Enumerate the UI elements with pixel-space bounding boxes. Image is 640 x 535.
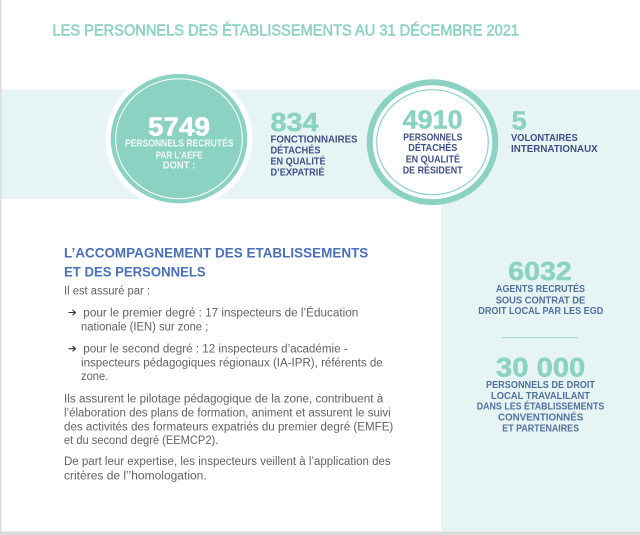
stat: 6032: 6032: [508, 256, 572, 286]
text block: expertise: De part leur expertise, les inspecteurs veillent à l’application des: [64, 456, 391, 468]
bullet: premier degré: pour le premier degré : 17 inspecteurs de l’Éducation: [83, 307, 358, 320]
stat: 30 000: DANS LES ÉTABLISSEMENTS: [477, 401, 605, 413]
stat: 834: DÉTACHÉS: [270, 144, 321, 156]
stat circle: 4910: 4910: [403, 104, 463, 134]
stat circle: 4910: EN QUALITÉ: [406, 153, 460, 165]
bullet: second degré: zone.: [81, 371, 108, 383]
stat: 5: [511, 105, 598, 155]
stat: 834: [270, 107, 358, 178]
stat: 30 000: CONVENTIONNÉS: [498, 412, 584, 424]
heading: accompagnement: [64, 246, 368, 279]
heading: accompagnement: ET DES PERSONNELS: [64, 264, 206, 279]
text block: pilotage: Ils assurent le pilotage pédagogique de la zone, contribuent à: [64, 393, 384, 405]
stat: 834: D’EXPATRIÉ: [270, 166, 325, 178]
stat circle: 5749: DONT :: [163, 161, 195, 172]
bullet: second degré: inspecteurs pédagogiques régionaux (IA-IPR), référents de: [81, 358, 383, 370]
stat: 5: 5: [512, 105, 527, 135]
stat: 6032: [478, 256, 603, 317]
text block: pilotage: l’élaboration des plans de formation, animent et assurent le suivi: [64, 408, 391, 420]
stat: 6032: DROIT LOCAL PAR LES EGD: [478, 306, 603, 317]
text block: pilotage: et du second degré (EEMCP2).: [64, 435, 218, 447]
stat: 6032: AGENTS RECRUTÉS: [496, 283, 585, 295]
stat circle: 5749: 5749: [148, 112, 210, 142]
stat: 834: EN QUALITÉ: [270, 156, 326, 168]
stat: 6032: SOUS CONTRAT DE: [496, 295, 586, 306]
heading: accompagnement: L’ACCOMPAGNEMENT DES ETABLISSEMENTS: [64, 246, 368, 261]
stat: 30 000: [477, 353, 605, 435]
text block: pilotage: [64, 393, 393, 447]
stat: 30 000: PERSONNELS DE DROIT: [486, 380, 595, 391]
bullet: premier degré: [68, 307, 358, 333]
panel: right column: [441, 199, 640, 532]
bullet: second degré: pour le second degré : 12 inspecteurs d’académie -: [83, 344, 348, 356]
stat circle: 5749: PAR L’AEFE: [156, 150, 203, 161]
panel: top band: [2, 90, 640, 199]
stat circle: 4910: DÉTACHÉS: [408, 142, 458, 154]
bullet: second degré: [68, 344, 383, 383]
bullet: premier degré: nationale (IEN) sur zone ;: [81, 321, 208, 333]
stat: 5: VOLONTAIRES: [511, 133, 578, 144]
text block: intro: Il est assuré par :: [64, 285, 150, 297]
stat: 834: 834: [270, 107, 319, 137]
text block: pilotage: des activités des formateurs expatriés du premier degré (EMFE): [64, 422, 393, 434]
stat circle: 5749: [106, 69, 252, 209]
stat: 30 000: 30 000: [496, 353, 585, 383]
text block: expertise: [64, 456, 391, 482]
stat: 5: INTERNATIONAUX: [511, 144, 598, 155]
stat circle: 5749: PERSONNELS RECRUTÉS: [125, 138, 234, 150]
stat circle: 4910: DE RÉSIDENT: [403, 164, 463, 176]
text block: expertise: critères de l’’homologation.: [64, 470, 207, 482]
stat: 30 000: LOCAL TRAVALILANT: [491, 391, 590, 402]
stat circle: 4910: [367, 79, 498, 205]
title: LES PERSONNELS DES ÉTABLISSEMENTS AU 31 DÉCEMBRE 2021: [52, 23, 519, 40]
stat circle: 4910: PERSONNELS: [403, 132, 463, 143]
stat: 30 000: ET PARTENAIRES: [502, 424, 579, 435]
stat: 834: FONCTIONNAIRES: [270, 135, 358, 146]
